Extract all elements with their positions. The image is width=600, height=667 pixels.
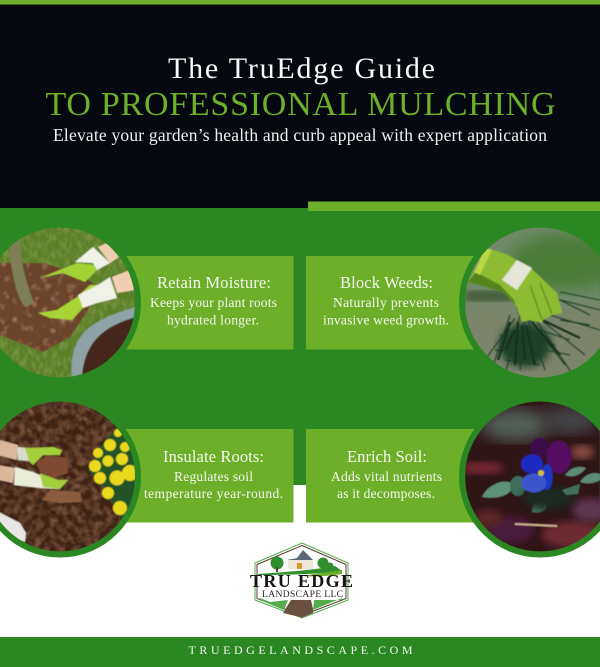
photo: gloved hands spreading mulch: [0, 227, 136, 378]
logo: [250, 543, 353, 618]
text: block weeds: Naturally prevents: [333, 295, 439, 310]
leaves: [482, 482, 513, 498]
text: retain moisture: Keeps your plant roots: [150, 295, 277, 310]
upper glove: [40, 263, 97, 282]
logo path: [283, 600, 313, 618]
twig: [515, 524, 557, 526]
text: retain moisture: hydrated longer.: [167, 312, 259, 328]
heading: insulate roots: Insulate Roots:: [163, 447, 264, 466]
tree trunk: [9, 240, 34, 307]
panel: retain moisture: [0, 222, 294, 384]
light wood chip: [42, 490, 82, 503]
title: [46, 52, 556, 123]
logo hill: [258, 566, 342, 575]
logo: LANDSCAPE LLC: [262, 590, 343, 600]
violet petals: [530, 438, 550, 458]
logo wordmark: TRU EDGE: [250, 571, 353, 591]
text: enrich soil: Adds vital nutrients: [331, 469, 442, 484]
footer url: TRUEDGELANDSCAPE.COM: [188, 643, 413, 657]
text: insulate roots: Regulates soil: [174, 469, 253, 484]
text: block weeds: [323, 295, 449, 328]
heading: retain moisture: Retain Moisture:: [157, 273, 271, 292]
logo grass: [260, 598, 342, 610]
header background: [0, 0, 600, 208]
photo: pansy in mulch: [460, 401, 600, 552]
text: enrich soil: [331, 469, 442, 501]
text: retain moisture: [150, 295, 277, 328]
mulch handful: [37, 455, 68, 478]
upper glove and arm: [0, 436, 18, 460]
blue petals: [521, 454, 543, 474]
lower glove: [38, 285, 98, 320]
footer bar: [0, 637, 600, 667]
text: block weeds: invasive weed growth.: [323, 312, 449, 328]
photo: glove pulling weeds: [465, 228, 600, 378]
panel: block weeds: [306, 222, 600, 384]
photo: hands with mulch and yellow flowers: [0, 401, 138, 552]
header accent bar: [308, 202, 600, 211]
top accent bar: [0, 0, 600, 4]
white bag corner: [0, 512, 27, 543]
logo trees: [270, 556, 284, 572]
logo trees right: [318, 558, 334, 570]
logo house: [287, 550, 313, 569]
flowers: [88, 428, 135, 520]
heading: block weeds: Block Weeds:: [340, 273, 433, 292]
heading: enrich soil: Enrich Soil:: [347, 447, 427, 466]
panel: insulate roots: [0, 396, 294, 558]
lower glove and arm: [0, 463, 15, 483]
subtitle: Elevate your garden’s health and curb appeal with expert application: [53, 125, 547, 145]
glove: [468, 248, 562, 323]
text: enrich soil: as it decomposes.: [337, 486, 435, 501]
logo badge: [255, 543, 348, 618]
title: The TruEdge Guide: [168, 52, 435, 85]
green main background: [0, 208, 600, 485]
text: insulate roots: [144, 469, 283, 501]
bucket: [72, 307, 136, 378]
weeds: [485, 292, 600, 378]
title highlight: TO PROFESSIONAL MULCHING: [46, 86, 556, 123]
text: insulate roots: temperature year-round.: [144, 486, 283, 501]
panel: enrich soil: [306, 396, 600, 558]
